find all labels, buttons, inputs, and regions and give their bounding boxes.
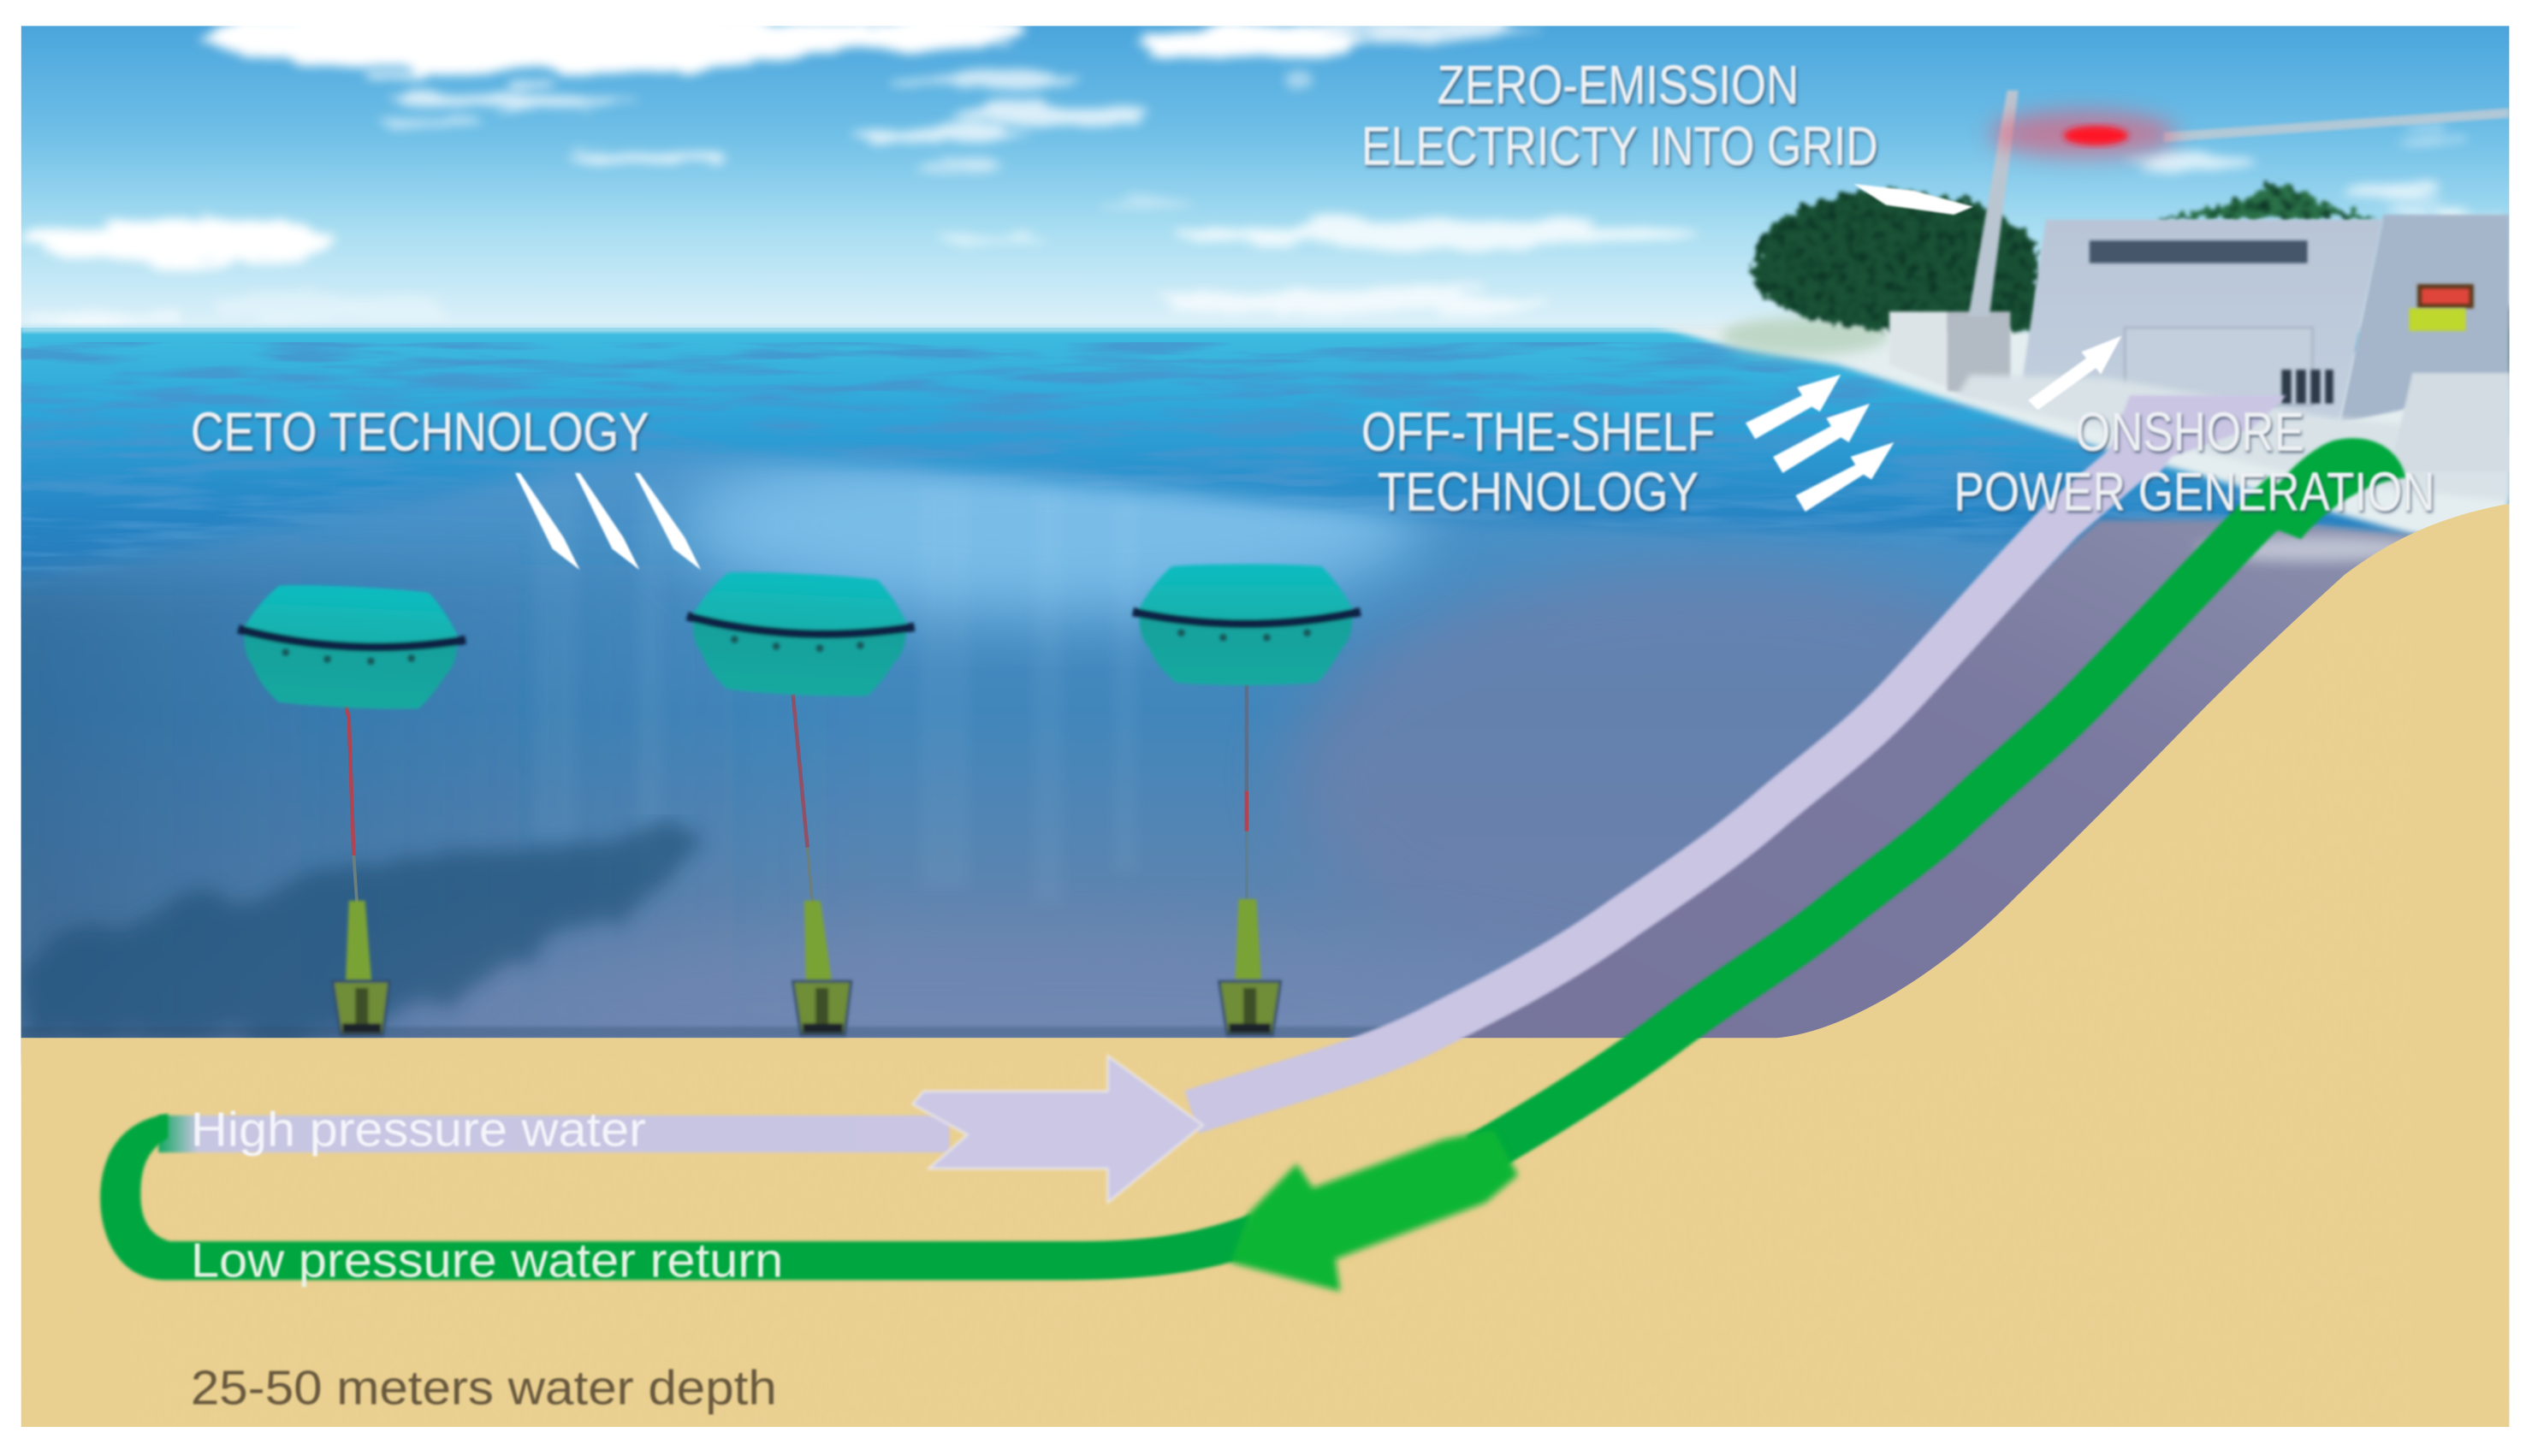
upper tether: [1246, 684, 1248, 791]
float: [684, 569, 916, 701]
float: [1133, 564, 1361, 685]
steps: [1957, 375, 2509, 500]
beach vegetation: [1722, 317, 1889, 355]
label: zero-emission electricity: ELECTRICTY INTO GRID: [1361, 115, 1878, 176]
tether: [793, 694, 808, 848]
arrows: off-the-shelf technology: [1746, 375, 1895, 512]
power building right face: [2339, 215, 2509, 423]
band: [238, 629, 465, 652]
sky: [21, 26, 2509, 333]
ocean surface: [21, 324, 2509, 619]
trees behind building: [2155, 181, 2374, 220]
band: [686, 616, 915, 639]
high pressure pipe: [158, 395, 2286, 1203]
left block: [1889, 311, 2010, 400]
power building front face: [2020, 220, 2383, 423]
label: onshore power generation: [1954, 400, 2435, 522]
CETO unit 3: [1133, 564, 1361, 1035]
building window: [2090, 240, 2308, 263]
label: low pressure water return: Low pressure water return: [191, 1234, 783, 1287]
tether: [346, 704, 353, 855]
float: [234, 582, 468, 713]
label: off-the-shelf technology: OFF-THE-SHELF: [1361, 400, 1715, 462]
label: high pressure water: High pressure water: [191, 1103, 646, 1157]
grid line: [2164, 108, 2509, 142]
CETO unit 1: [234, 582, 468, 1035]
lower tether: [1246, 832, 1248, 899]
underwater: [0, 435, 2509, 1098]
red warning sign: [2417, 284, 2474, 308]
light haze at slope top: [2196, 536, 2422, 562]
label: onshore power generation: ONSHORE: [2075, 400, 2304, 462]
anchor base: [1219, 981, 1280, 1035]
label: onshore power generation: POWER GENERATION: [1954, 460, 2435, 522]
low pressure pipe: [100, 438, 2406, 1292]
label: water depth: 25-50 meters water depth: [191, 1361, 777, 1415]
transmission pole: [1968, 91, 2019, 317]
label: off-the-shelf technology: [1361, 400, 1715, 522]
red power glow: [1989, 111, 2177, 157]
lower tether: [808, 848, 812, 904]
anchor base: [793, 981, 851, 1035]
band: [1133, 612, 1361, 624]
label: off-the-shelf technology: TECHNOLOGY: [1378, 460, 1699, 522]
green pump: [1236, 899, 1261, 980]
arrow: onshore power generation: [2028, 335, 2122, 410]
building door: [2125, 328, 2312, 405]
vents: [2281, 370, 2333, 404]
arrowhead: [1230, 1130, 1518, 1292]
bolts: [282, 648, 416, 667]
clouds: [16, 3, 2511, 328]
arrow: electricity into grid: [1853, 184, 1973, 215]
sand seabed: [21, 504, 2509, 1427]
hook end: [2252, 438, 2406, 539]
building inlet: [2099, 395, 2286, 478]
label: zero-emission electricity: ZERO-EMISSION: [1438, 54, 1799, 115]
green pump: [804, 901, 832, 981]
loop and return: [100, 1114, 1252, 1280]
rising section: [1478, 493, 2285, 1156]
rising section: [1192, 460, 2132, 1112]
light rays: [533, 484, 1137, 904]
CETO unit 2: [684, 569, 916, 1035]
seabed shadow line: [21, 1027, 1442, 1038]
tree beside building: [2470, 307, 2509, 375]
anchor base: [333, 981, 389, 1035]
right wall: [2390, 373, 2509, 471]
bolts: [730, 635, 864, 654]
bolts: [1177, 629, 1311, 642]
seabed slope: [1405, 517, 2509, 1065]
arrowhead: [912, 1056, 1203, 1203]
label: CETO technology: CETO TECHNOLOGY: [191, 400, 649, 462]
label: zero-emission electricity: [1361, 54, 1878, 176]
lower tether: [353, 855, 357, 904]
dark seabed patch: [21, 835, 710, 1038]
horizontal section: [158, 1116, 950, 1152]
beach: [1653, 317, 2509, 549]
red tether: [1246, 791, 1248, 832]
green pump: [346, 901, 371, 981]
yellow warning sign: [2409, 308, 2465, 331]
onshore site: [1752, 91, 2509, 500]
arrows: CETO technology: [515, 473, 701, 570]
trees: [1752, 191, 2037, 331]
